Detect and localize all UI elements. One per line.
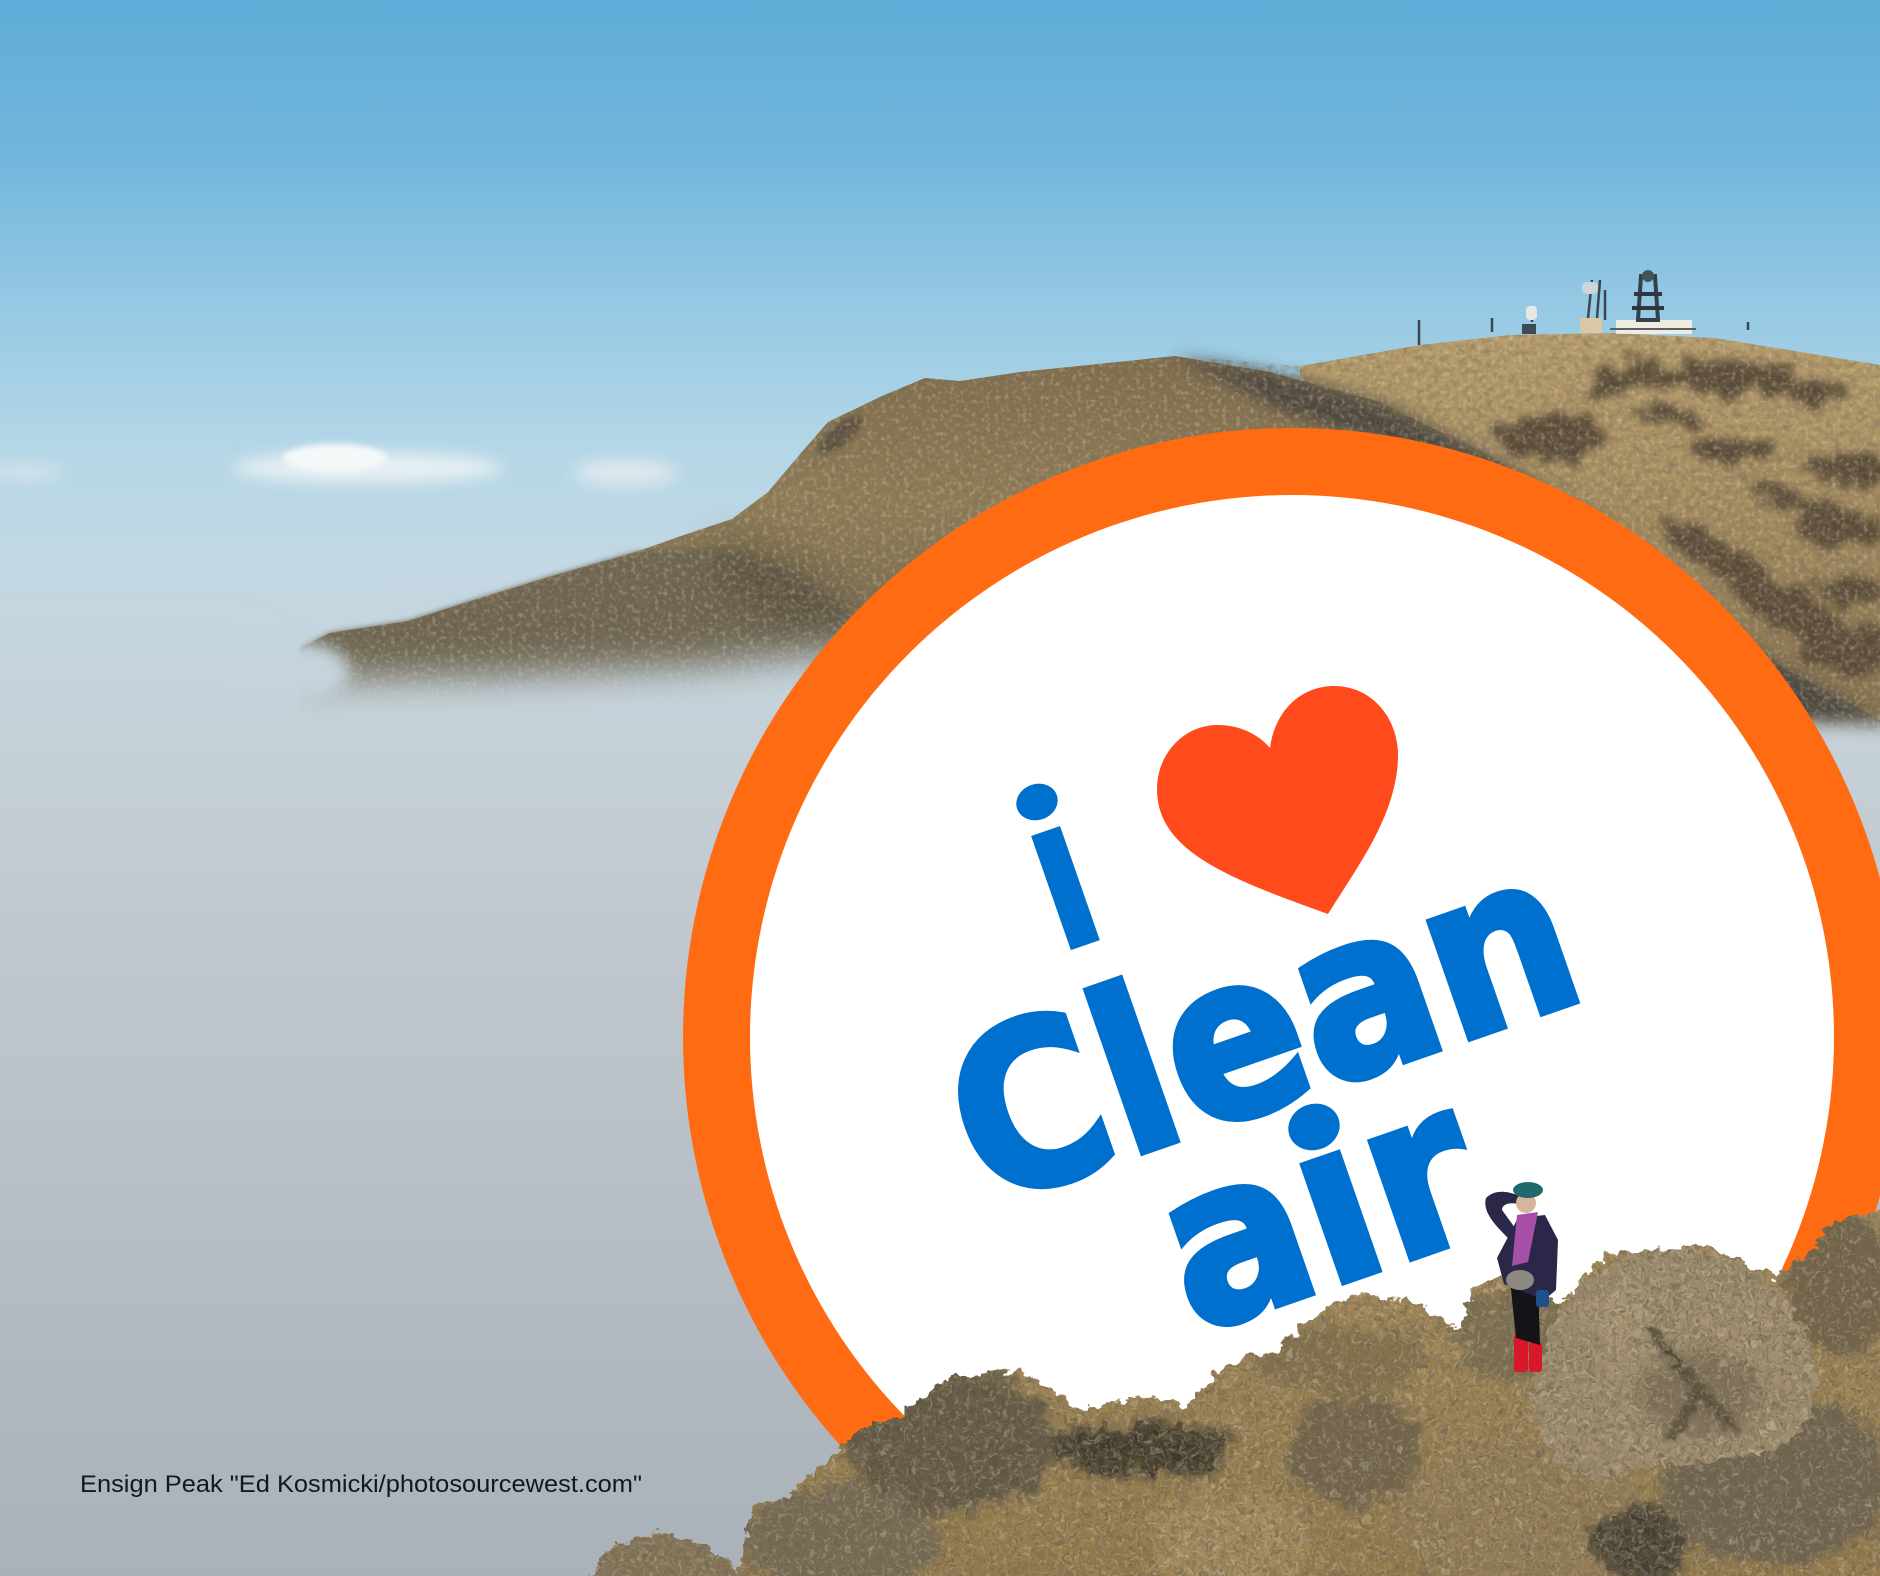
scarf	[1512, 1212, 1538, 1266]
face	[1516, 1193, 1536, 1213]
shrubs on back hill	[1497, 350, 1880, 674]
rounded dot of i	[1011, 777, 1063, 827]
rounded dot of i in air	[1267, 1089, 1353, 1161]
bag	[1506, 1270, 1534, 1290]
shaded saddle	[695, 526, 865, 654]
cup	[1536, 1290, 1549, 1307]
person on ridge	[1485, 1182, 1558, 1372]
fog bank over base of mountain	[0, 640, 1880, 1100]
hill texture	[310, 333, 1880, 730]
foreground: rocky ridge with sagebrush	[580, 1200, 1880, 1576]
icon: heart	[1157, 686, 1398, 914]
rocky outcrop	[812, 409, 868, 461]
slogan: i heart Clean air	[917, 686, 1609, 1385]
small rock	[585, 1535, 745, 1576]
word: Clean: Clean	[917, 799, 1609, 1258]
word: air: air	[1126, 1034, 1510, 1385]
mountain: front hill	[300, 333, 1880, 730]
boulder	[1532, 1246, 1816, 1480]
word: i: i	[990, 743, 1131, 1005]
photo credit: Ensign Peak "Ed Kosmicki/photosourcewest.com"	[80, 1471, 642, 1498]
lower shaded lobe	[300, 548, 880, 780]
legs	[1510, 1280, 1540, 1345]
dark ridge shadow	[1175, 356, 1880, 720]
boots	[1514, 1334, 1528, 1372]
antenna station	[1419, 270, 1748, 345]
raised arm	[1485, 1192, 1520, 1238]
mountain: back hill with antenna station	[1300, 270, 1880, 780]
badge: orange ring and white disc	[683, 428, 1880, 1576]
sagebrush bushes	[740, 1205, 1880, 1576]
jacket	[1497, 1215, 1558, 1300]
clouds	[0, 444, 677, 486]
hat	[1513, 1182, 1543, 1198]
texture	[580, 1200, 1880, 1576]
